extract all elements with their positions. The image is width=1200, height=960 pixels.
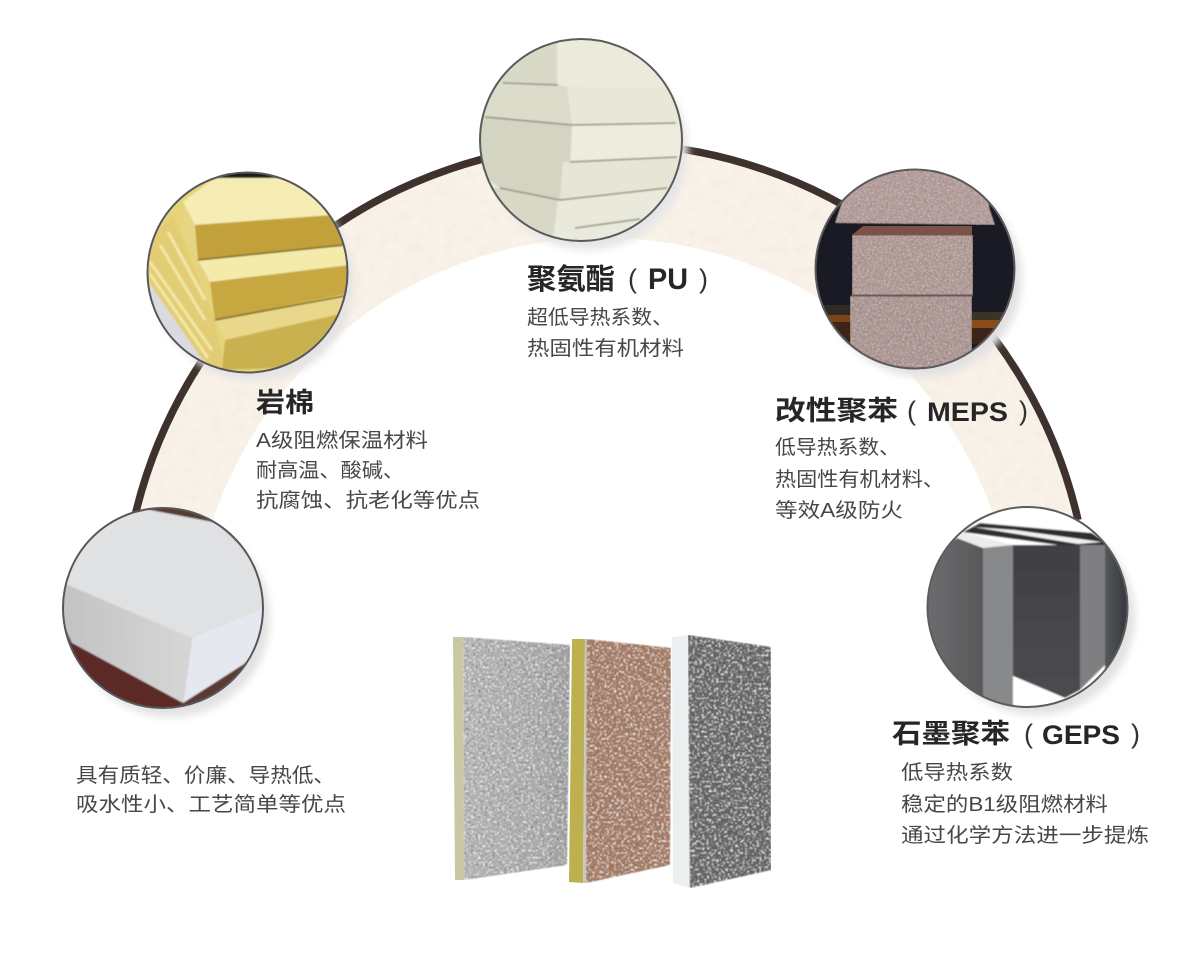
- heading: graphite polystyrene: (: [1024, 719, 1033, 749]
- material circle: rock wool: [145, 170, 354, 381]
- material circle: EPS white foam: [50, 500, 275, 717]
- heading: polyurethane: [527, 263, 708, 296]
- heading: polyurethane: PU: [648, 263, 688, 296]
- panel: terracotta with rock wool core: [569, 639, 671, 883]
- description: rock wool: 抗腐蚀、抗老化等优点: [256, 489, 480, 512]
- description: polyurethane: 超低导热系数、: [527, 306, 673, 329]
- centre product: three insulation panels: [453, 635, 771, 888]
- material circle: graphite polystyrene: [920, 500, 1135, 715]
- dark arc connecting the material circles: [134, 143, 1078, 520]
- description: graphite polystyrene: [901, 761, 1149, 847]
- heading: modified polystyrene: ): [1019, 396, 1028, 426]
- label: polyurethane: [527, 263, 708, 360]
- heading: rock wool: 岩棉: [256, 388, 314, 418]
- heading: graphite polystyrene: ): [1131, 719, 1140, 749]
- description: polyurethane: [527, 306, 684, 360]
- background band: cream paper arc: [134, 143, 1078, 520]
- heading: polyurethane: ): [699, 264, 708, 294]
- heading: graphite polystyrene: [892, 719, 1140, 750]
- heading: modified polystyrene: (: [907, 396, 916, 426]
- description: modified polystyrene: [775, 436, 944, 522]
- material circle: modified polystyrene: [810, 160, 1022, 377]
- label: graphite polystyrene: [892, 719, 1149, 847]
- description: polyurethane: 热固性有机材料: [527, 337, 684, 360]
- description: graphite polystyrene: 低导热系数: [901, 761, 1013, 784]
- description: graphite polystyrene: 稳定的B1级阻燃材料: [901, 793, 1108, 816]
- heading: modified polystyrene: 改性聚苯: [775, 396, 898, 426]
- panel: dark granite with white EPS core: [672, 635, 771, 888]
- material circle: polyurethane: [476, 36, 688, 250]
- heading: modified polystyrene: [775, 396, 1028, 427]
- heading: polyurethane: 聚氨酯: [527, 263, 615, 296]
- heading: graphite polystyrene: 石墨聚苯: [892, 719, 1010, 749]
- description: modified polystyrene: 低导热系数、: [775, 436, 900, 459]
- description: modified polystyrene: 等效A级防火: [775, 499, 903, 522]
- heading: polyurethane: (: [628, 264, 637, 294]
- label: modified polystyrene: [775, 396, 1028, 522]
- description: rock wool: A级阻燃保温材料: [256, 429, 428, 452]
- heading: graphite polystyrene: GEPS: [1042, 720, 1120, 750]
- description: rock wool: 耐高温、酸碱、: [256, 459, 404, 482]
- description: EPS white foam: 具有质轻、价廉、导热低、: [76, 764, 335, 787]
- description: EPS white foam: [76, 764, 346, 816]
- description: modified polystyrene: 热固性有机材料、: [775, 468, 944, 491]
- description: rock wool: [256, 429, 480, 512]
- label: rock wool: [256, 388, 480, 512]
- description: EPS white foam: 吸水性小、工艺简单等优点: [76, 793, 346, 816]
- panel: grey stone with foam core: [453, 637, 570, 880]
- heading: modified polystyrene: MEPS: [927, 397, 1008, 427]
- description: graphite polystyrene: 通过化学方法进一步提炼: [901, 824, 1149, 847]
